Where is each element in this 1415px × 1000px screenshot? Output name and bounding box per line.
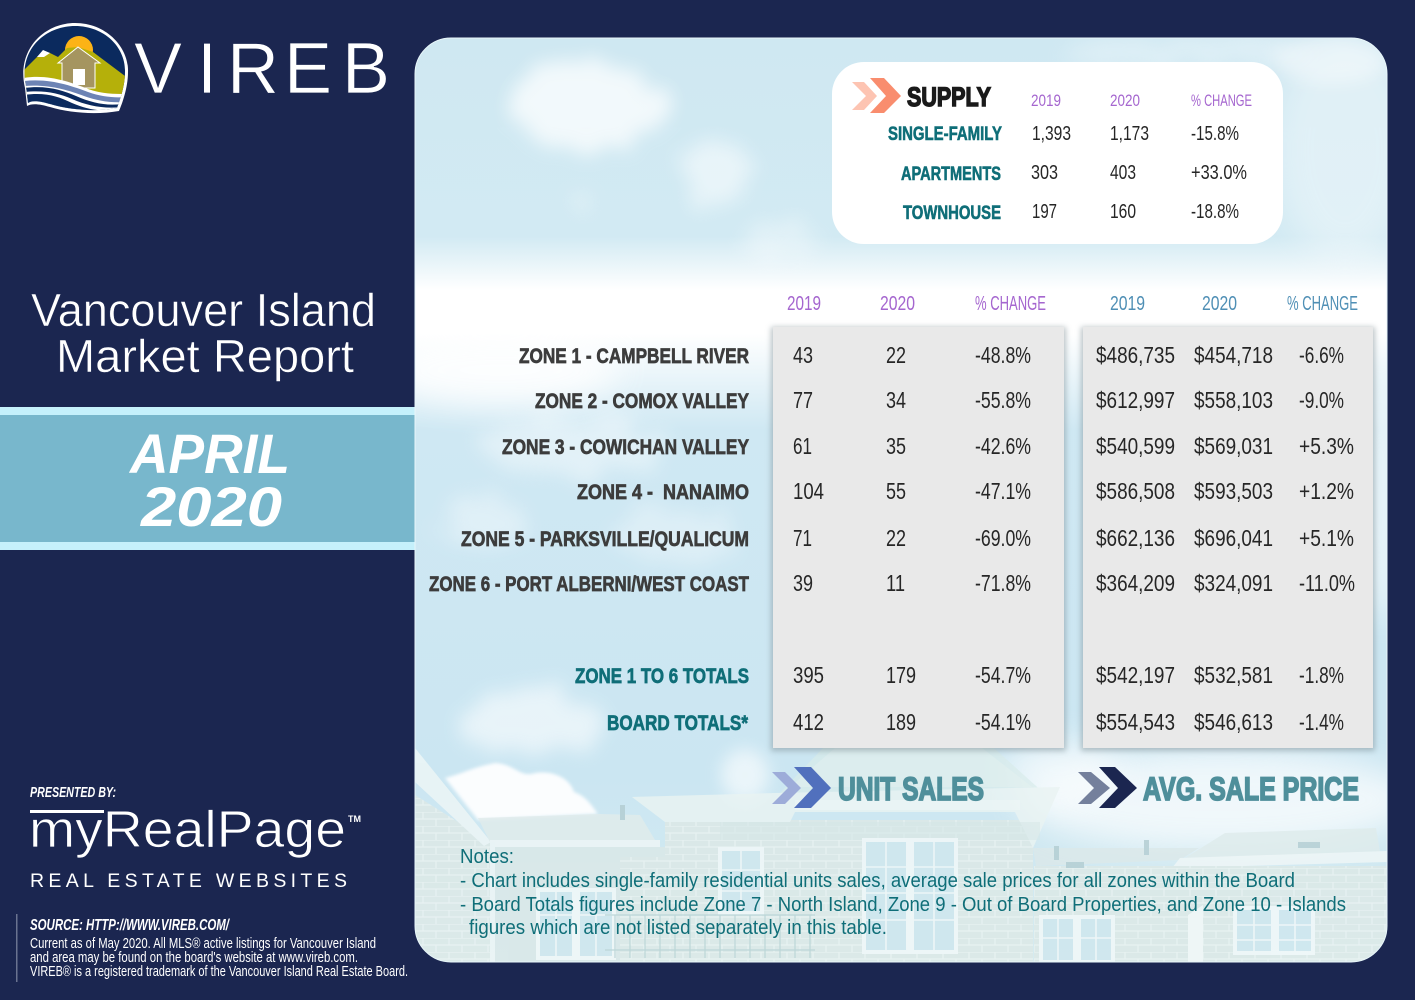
column headers: average sale price: 2020 (1202, 293, 1237, 315)
presented by block: REAL ESTATE WEBSITES (30, 870, 347, 892)
panel: unit sales table: 61 (793, 433, 812, 459)
supply table: 197 (1032, 201, 1057, 223)
supply table (888, 92, 1252, 224)
panel: unit sales table: 43 (793, 342, 813, 368)
panel: average sale price table: $554,543 (1096, 709, 1175, 735)
panel: average sale price table: $546,613 (1194, 709, 1273, 735)
source block: Current as of May 2020. All MLS® active listings for Vancouver Island (30, 935, 376, 952)
panel: unit sales table (771, 327, 1066, 751)
notes: - Board Totals figures include Zone 7 - North Island, Zone 9 - Out of Board Properties, and Zone 10 - Islands (460, 894, 1346, 916)
panel: average sale price table: +1.2% (1299, 478, 1354, 504)
source block: and area may be found on the board's website at www.vireb.com. (30, 949, 358, 966)
logo: VIREB (23, 23, 386, 114)
panel: average sale price table: $542,197 (1096, 662, 1175, 688)
panel: unit sales table: 395 (793, 662, 824, 688)
supply table: 403 (1110, 162, 1136, 184)
legend: average sale price (1078, 767, 1359, 808)
presented by block: PRESENTED BY: (30, 784, 116, 801)
vent (620, 805, 625, 820)
panel: average sale price table: $612,997 (1096, 387, 1175, 413)
panel: unit sales table: -54.1% (975, 709, 1031, 735)
icon: VIREB mountain house badge (23, 23, 128, 114)
panel: average sale price table: $364,209 (1096, 570, 1175, 596)
presented by block: myRealPage (29, 801, 346, 859)
left wing roof (478, 814, 655, 842)
supply table: 1,393 (1032, 123, 1071, 145)
panel: unit sales table: -42.6% (975, 433, 1031, 459)
panel: average sale price table (1081, 327, 1375, 751)
notes: figures which are not listed separately in this table. (469, 917, 887, 939)
panel: sky and house background (380, 36, 1415, 962)
title: Market Report (56, 330, 354, 382)
panel: average sale price table: $540,599 (1096, 433, 1175, 459)
panel: average sale price table: -11.0% (1299, 570, 1355, 596)
zone labels: ZONE 1 TO 6 TOTALS (575, 664, 749, 688)
column headers: unit sales: 2019 (787, 293, 821, 315)
zone labels: ZONE 6 - PORT ALBERNI/WEST COAST (429, 572, 749, 596)
panel: average sale price table: -1.4% (1299, 709, 1344, 735)
panel: unit sales table: -48.8% (975, 342, 1031, 368)
presented by block: TM (348, 814, 361, 824)
supply table: 2020 (1110, 92, 1140, 110)
panel: average sale price table: -6.6% (1299, 342, 1344, 368)
panel: unit sales table: -55.8% (975, 387, 1031, 413)
column headers: average sale price: 2019 (1110, 293, 1145, 315)
windows (538, 840, 1313, 962)
supply table: 1,173 (1110, 123, 1149, 145)
panel: average sale price table: $486,735 (1096, 342, 1175, 368)
panel: unit sales table: -69.0% (975, 525, 1031, 551)
title: Vancouver Island (31, 284, 376, 336)
panel: average sale price table: +5.3% (1299, 433, 1354, 459)
supply table: -18.8% (1191, 201, 1239, 223)
zone labels: ZONE 2 - COMOX VALLEY (535, 389, 749, 413)
house (415, 748, 1387, 962)
panel: unit sales table: -54.7% (975, 662, 1031, 688)
panel: unit sales table: 189 (886, 709, 916, 735)
panel: average sale price table: $593,503 (1194, 478, 1273, 504)
source block: VIREB® is a registered trademark of the Vancouver Island Real Estate Board. (30, 963, 408, 980)
panel: average sale price table: $586,508 (1096, 478, 1175, 504)
supply table: -15.8% (1191, 123, 1239, 145)
supply heading: SUPPLY (907, 82, 991, 112)
supply table: 160 (1110, 201, 1136, 223)
panel: unit sales table: 11 (886, 570, 905, 596)
source block (16, 914, 408, 982)
panel: unit sales table: -71.8% (975, 570, 1031, 596)
supply table: APARTMENTS (901, 164, 1001, 185)
panel: average sale price table: $558,103 (1194, 387, 1273, 413)
legend: unit sales: UNIT SALES (838, 771, 984, 807)
panel: unit sales table: 104 (793, 478, 824, 504)
panel: unit sales table: 22 (886, 342, 906, 368)
supply table: SINGLE-FAMILY (888, 124, 1002, 145)
panel: average sale price table: $696,041 (1194, 525, 1273, 551)
title (31, 284, 376, 382)
panel: unit sales table: 35 (886, 433, 906, 459)
panel: average sale price table: -1.8% (1299, 662, 1344, 688)
zone labels: ZONE 1 - CAMPBELL RIVER (519, 344, 749, 368)
date banner: 2020 (140, 475, 282, 538)
supply table: TOWNHOUSE (903, 203, 1001, 224)
panel: unit sales table: 412 (793, 709, 824, 735)
panel: average sale price table: $454,718 (1194, 342, 1273, 368)
panel: average sale price table: $569,031 (1194, 433, 1273, 459)
date banner: APRIL (128, 422, 290, 485)
zone labels: ZONE 3 - COWICHAN VALLEY (502, 435, 749, 459)
zone labels: ZONE 5 - PARKSVILLE/QUALICUM (461, 527, 749, 551)
column headers: average sale price: % CHANGE (1287, 293, 1358, 315)
center block (665, 820, 1033, 962)
railing (605, 915, 815, 958)
panel: average sale price table: $324,091 (1194, 570, 1273, 596)
wordmark: VIREB (134, 29, 390, 109)
zone labels (429, 344, 749, 735)
panel: supply (832, 62, 1283, 244)
notes: - Chart includes single-family residential units sales, average sale prices for all zones within the Board (460, 870, 1295, 892)
icon: supply chevrons (852, 78, 901, 113)
right roofs (1033, 848, 1199, 866)
left wing wall (415, 795, 490, 962)
column headers: unit sales: 2020 (880, 293, 915, 315)
panel: unit sales table: 39 (793, 570, 813, 596)
panel: unit sales table: 77 (793, 387, 813, 413)
column headers: unit sales (787, 293, 1046, 315)
cloud above house (445, 763, 598, 820)
panel: average sale price table: +5.1% (1299, 525, 1354, 551)
date banner (0, 407, 415, 550)
panel: unit sales table: 22 (886, 525, 906, 551)
zone labels: ZONE 4 - NANAIMO (577, 480, 749, 504)
panel: average sale price table: $532,581 (1194, 662, 1273, 688)
main gable (782, 754, 1038, 792)
column headers: average sale price (1110, 293, 1358, 315)
panel: unit sales table: 55 (886, 478, 906, 504)
vents (1054, 840, 1320, 868)
panel: unit sales table: 71 (793, 525, 812, 551)
legend: unit sales (772, 767, 984, 808)
source block: SOURCE: HTTP://WWW.VIREB.COM/ (30, 917, 230, 934)
panel: unit sales table: 179 (886, 662, 916, 688)
supply table: 2019 (1031, 92, 1061, 110)
zone labels: BOARD TOTALS* (607, 711, 748, 735)
panel outline highlight (415, 38, 1387, 962)
panel: average sale price table: $662,136 (1096, 525, 1175, 551)
notes (460, 846, 1346, 939)
panel: unit sales table: -47.1% (975, 478, 1031, 504)
supply table: % CHANGE (1191, 92, 1252, 110)
notes: Notes: (460, 846, 514, 868)
supply table: 303 (1031, 162, 1058, 184)
panel: average sale price table: -9.0% (1299, 387, 1344, 413)
legend: average sale price: AVG. SALE PRICE (1143, 771, 1359, 807)
presented by block (29, 784, 361, 892)
supply table: +33.0% (1191, 162, 1247, 184)
column headers: unit sales: % CHANGE (975, 293, 1046, 315)
panel: unit sales table: 34 (886, 387, 906, 413)
